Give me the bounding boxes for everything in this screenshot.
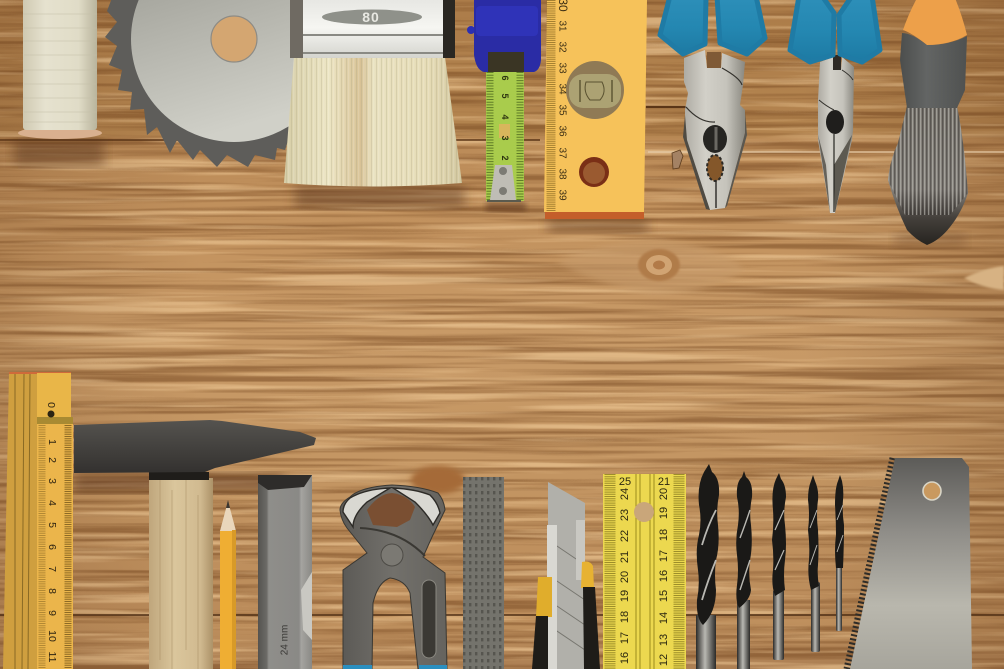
pencil: [220, 500, 236, 669]
nipper body: [340, 485, 447, 669]
nipper jaws: [343, 488, 440, 527]
folding ruler: [3, 373, 73, 669]
thread spool: [18, 0, 102, 139]
knife left grip: [532, 577, 552, 669]
folding ruler numbers: 11: [46, 652, 58, 663]
folding ruler numbers: 3: [46, 478, 58, 484]
ruler right numbers: 13: [658, 634, 670, 646]
folding ruler numbers: 1: [46, 439, 58, 445]
level scale numbers: 35: [556, 104, 568, 116]
level scale numbers: 37: [556, 147, 568, 159]
drill bit 5: [835, 475, 844, 631]
needle handles: [790, 0, 880, 62]
level scale numbers: [556, 0, 570, 201]
ruler right numbers: 12: [658, 654, 670, 666]
level hole: [579, 157, 609, 187]
folding ruler numbers: 2: [46, 457, 58, 463]
level scale numbers: 31: [556, 20, 568, 32]
level scale numbers: 38: [556, 168, 568, 180]
ruler left numbers: 18: [619, 611, 631, 623]
ruler left numbers: 22: [619, 530, 631, 542]
ruler right numbers: 16: [658, 570, 670, 582]
round brush grip: [900, 33, 967, 108]
drill bit 3: [772, 473, 786, 660]
knife right grip: [581, 562, 600, 669]
saw arbor hole: [211, 16, 257, 62]
round paint brush: [888, 0, 968, 245]
ruler left numbers: 17: [619, 632, 631, 644]
chisel size marking: 24 mm: [280, 625, 290, 655]
ruler right numbers: 20: [658, 488, 670, 500]
folding ruler numbers: 5: [46, 522, 58, 528]
ruler right numbers: [658, 476, 670, 666]
tape measure: [467, 0, 541, 201]
nipper lever edge: [360, 528, 425, 556]
drill bit 2: [736, 471, 752, 669]
ruler left numbers: 23: [619, 509, 631, 521]
tape blade: 5: [500, 93, 510, 99]
folding ruler numbers: [45, 402, 58, 663]
ruler right numbers: 17: [658, 550, 670, 562]
tape blade: [486, 72, 524, 201]
tape blade: 4: [500, 114, 510, 120]
wood knot center: [556, 240, 745, 295]
ruler left numbers: 20: [619, 571, 631, 583]
ruler left numbers: 16: [619, 652, 631, 664]
yellow spirit level: [544, 0, 647, 219]
end nippers: [340, 485, 447, 669]
level scale numbers: 33: [556, 62, 568, 74]
hammer head: [74, 420, 316, 473]
folding ruler numbers: 9: [46, 610, 58, 616]
hand saw blade: [847, 458, 972, 669]
wood knot lower: [411, 466, 465, 494]
ruler right numbers: 18: [658, 529, 670, 541]
chisel: [258, 475, 312, 669]
needle head: [818, 55, 854, 213]
nipper grip label plate: [422, 580, 436, 658]
ruler right numbers: 15: [658, 590, 670, 602]
folding ruler numbers: 0: [45, 402, 57, 408]
hammer handle: [149, 472, 213, 669]
brush bristles: [284, 57, 462, 186]
ruler hole: [634, 502, 654, 522]
ruler left numbers: 25: [619, 476, 631, 488]
level scale numbers: 39: [556, 189, 568, 201]
ruler right numbers: 19: [658, 507, 670, 519]
ruler left numbers: 21: [619, 551, 631, 563]
plier handles: [660, 0, 765, 54]
brush size number: 80: [362, 9, 380, 25]
brush ferrule: [290, 0, 455, 58]
nipper pivot: [381, 544, 403, 566]
utility knife: [532, 482, 600, 669]
level scale numbers: 36: [556, 125, 568, 137]
drill bit 4: [808, 475, 820, 652]
hammer: [74, 420, 316, 669]
flat file: [463, 477, 504, 669]
tape blade: 2: [500, 155, 510, 161]
tape blade: 6: [500, 75, 510, 81]
flat paint brush: [284, 0, 462, 186]
tape blade: 3: [500, 135, 510, 141]
ruler right numbers: 21: [658, 476, 670, 488]
cast shadows: [14, 130, 965, 493]
wood chip near pliers: [672, 150, 683, 169]
saw hanging hole: [923, 482, 941, 500]
ruler left numbers: 19: [619, 590, 631, 602]
needle nose pliers: [790, 0, 880, 213]
combination pliers: [660, 0, 765, 210]
level scale numbers: 34: [556, 83, 568, 95]
folding ruler numbers: 4: [46, 500, 58, 506]
yellow steel ruler: [603, 474, 686, 669]
ruler left numbers: [619, 476, 631, 664]
folding ruler numbers: 8: [46, 588, 58, 594]
level bubble vial: [566, 61, 624, 119]
wood knot right edge: [964, 266, 1004, 290]
front ruler leaf: [37, 373, 73, 669]
tape body: [467, 0, 541, 72]
tape hook: [487, 165, 521, 201]
folded layers: [3, 373, 71, 669]
level scale numbers: 32: [556, 41, 568, 53]
ruler left numbers: 24: [619, 488, 631, 500]
folding ruler numbers: 7: [46, 566, 58, 572]
nipper throat opening: [367, 493, 415, 527]
knife blade: [547, 482, 585, 669]
plier head: [683, 50, 747, 210]
round brush cap: [903, 0, 967, 45]
drill bit 1: [696, 464, 719, 669]
ruler right numbers: 14: [658, 612, 670, 624]
nipper blue sleeves: [343, 665, 447, 669]
folding ruler numbers: 10: [46, 630, 58, 642]
folding ruler numbers: 6: [46, 544, 58, 550]
saw blade: [105, 0, 337, 167]
round brush bristles: [888, 106, 968, 245]
